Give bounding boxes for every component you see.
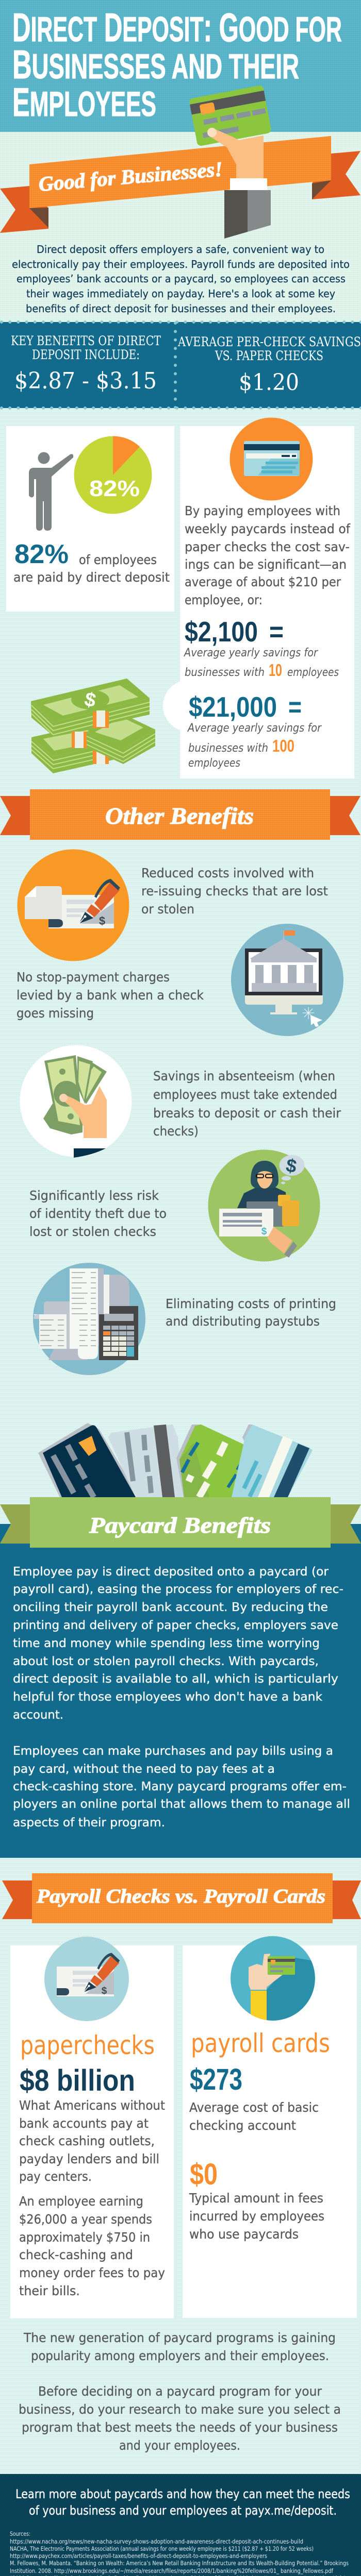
icon: document, check and pen: $ bbox=[99, 914, 105, 927]
text bbox=[166, 1296, 336, 1329]
stat: 2,100: = bbox=[269, 616, 284, 648]
text: and distributing paystubs bbox=[166, 1314, 320, 1329]
key benefits value: $2.87 - $3.15 bbox=[14, 368, 157, 394]
paycard text: employee, or: bbox=[185, 592, 262, 607]
pie chart: 82% bbox=[89, 476, 140, 501]
intro paragraph: their wages immediately on payday. Here's a look at some key bbox=[26, 287, 335, 300]
text: or stolen bbox=[141, 902, 194, 917]
panel: paycard benefits band bbox=[0, 1524, 361, 1858]
benefit: absenteeism savings bbox=[20, 1045, 341, 1158]
text: employee earning bbox=[19, 2194, 165, 2298]
key benefits label bbox=[11, 333, 161, 362]
icon: receipts and calculator bbox=[33, 1263, 145, 1375]
heading: Payroll Checks vs. Payroll Cards bbox=[36, 1886, 325, 1907]
intro paragraph: benefits of direct deposit for businesses and their employees. bbox=[26, 302, 336, 315]
paycard paragraph 1: onciling their payroll bank account. By reducing the bbox=[13, 1601, 328, 1614]
paycard paragraph 1: helpful for those employees who don't have a bank bbox=[13, 1690, 323, 1704]
text: goes missing bbox=[17, 1006, 94, 1021]
icon: hand holding cash bbox=[20, 1045, 132, 1158]
text: employee earning: check-cashing and bbox=[19, 2247, 133, 2262]
icon: fan of cards bbox=[38, 1423, 313, 1497]
heading: Paycard Benefits bbox=[89, 1514, 271, 1538]
text: employee earning: their bills. bbox=[19, 2283, 80, 2298]
text: lost or stolen checks bbox=[29, 1224, 156, 1239]
text: 8 billion: payday lenders and bill bbox=[19, 2151, 159, 2166]
text: 8 billion: check cashing outlets, bbox=[19, 2133, 155, 2148]
paycard text: weekly paycards instead of bbox=[185, 521, 351, 536]
key benefits label: KEY BENEFITS OF DIRECT bbox=[11, 333, 161, 348]
text: 0: who use paycards bbox=[189, 2227, 299, 2242]
paycard text: ings can be significant—an bbox=[185, 557, 347, 572]
intro paragraph bbox=[12, 243, 350, 315]
intro paragraph: electronically pay their employees. Payroll funds are deposited into bbox=[12, 258, 350, 270]
icon: online bank monitor bbox=[231, 924, 343, 1036]
text: Eliminating costs of printing bbox=[166, 1296, 336, 1311]
text: 0: incurred by employees bbox=[189, 2209, 324, 2224]
text: 8 billion: pay centers. bbox=[19, 2169, 92, 2184]
top stack bbox=[31, 679, 150, 736]
lower left stack bbox=[31, 721, 126, 773]
closing text: before deciding: program that best meets the needs of your business bbox=[22, 2420, 338, 2435]
paycard paragraph 2: pay card, without the need to pay fees at a bbox=[13, 1762, 275, 1776]
icon: thief with check and coins: $ bbox=[284, 1155, 298, 1177]
stat: 2,100: $2,100 bbox=[185, 616, 258, 648]
title: EMPLOYEES bbox=[12, 79, 156, 125]
text bbox=[29, 1188, 167, 1239]
panel: paycard savings bbox=[163, 417, 354, 778]
intro paragraph: Direct deposit offers employers a safe, convenient way to bbox=[37, 243, 324, 256]
text: levied by a bank when a check bbox=[17, 988, 204, 1003]
text: checks) bbox=[153, 1124, 199, 1139]
paycard text bbox=[185, 503, 351, 607]
text: breaks to deposit or cash their bbox=[153, 1106, 341, 1121]
top stack: $ bbox=[83, 688, 97, 712]
benefit: paystub costs bbox=[33, 1263, 336, 1375]
stat: 21,000: businesses with bbox=[188, 742, 268, 755]
teal card bbox=[232, 1425, 313, 1497]
icon: check and pen: $ bbox=[102, 1986, 107, 1996]
paycard paragraph 1: direct deposit is available to all, which is particularly bbox=[13, 1672, 338, 1686]
benefit: stop-payment charges bbox=[17, 924, 343, 1036]
icon: thief with check and coins bbox=[208, 1150, 320, 1261]
stat: 0: $0 bbox=[190, 2158, 218, 2191]
heading: Other Benefits bbox=[105, 803, 254, 829]
closing text: before deciding: Before deciding on a paycard program for your bbox=[38, 2384, 322, 2399]
text: employees must take extended bbox=[153, 1087, 337, 1102]
stat: 2,100: 10 bbox=[269, 660, 282, 680]
stat: 8 billion: $8 billion bbox=[20, 2064, 135, 2097]
ribbon: paycard benefits bbox=[0, 1497, 361, 1548]
closing text: new generation bbox=[23, 2330, 336, 2363]
ribbon: payroll checks vs payroll cards bbox=[2, 1873, 361, 1923]
stat: 2,100: Average yearly savings for bbox=[183, 647, 319, 659]
sources bbox=[10, 2530, 349, 2576]
text: Significantly less risk bbox=[29, 1188, 159, 1203]
stat: 2,100: employees bbox=[287, 666, 339, 679]
icon: hand holding green card bbox=[189, 85, 272, 239]
text: 8 billion: What Americans without bbox=[19, 2098, 165, 2113]
icon: stacks of cash bbox=[31, 679, 155, 773]
paycard paragraph 2 bbox=[13, 1744, 350, 1829]
footer panel bbox=[0, 2474, 361, 2576]
text: 8 billion bbox=[19, 2098, 165, 2184]
paycard paragraph 2: Employees can make purchases and pay bills using a bbox=[13, 1744, 333, 1758]
stat: 21,000 bbox=[187, 691, 322, 770]
pie chart bbox=[74, 436, 152, 514]
text: Savings in absenteeism (when bbox=[153, 1069, 335, 1083]
text: 273 bbox=[189, 2100, 319, 2133]
text bbox=[17, 970, 204, 1021]
key benefits label: DEPOSIT INCLUDE: bbox=[32, 347, 140, 362]
stat: 2,100 bbox=[183, 616, 339, 680]
text bbox=[153, 1069, 341, 1139]
text: re-issuing checks that are lost bbox=[141, 884, 328, 899]
icon: person pointing bbox=[29, 452, 73, 531]
stat: 21,000: employees bbox=[188, 757, 240, 770]
paycard paragraph 1 bbox=[13, 1565, 343, 1722]
panel: key figures band bbox=[0, 322, 361, 408]
closing text: new generation: The new generation of paycard programs is gaining bbox=[23, 2330, 336, 2345]
title bbox=[12, 5, 342, 125]
text: employee earning: money order fees to pay bbox=[19, 2265, 165, 2280]
paycard paragraph 1: about lost or stolen payroll checks. With paycards, bbox=[13, 1655, 319, 1668]
text: 8 billion: bank accounts pay at bbox=[19, 2116, 149, 2131]
closing text: new generation: popularity among employers and their employees. bbox=[31, 2348, 329, 2363]
paycard paragraph 2: ployers an online portal that allows them to manage all bbox=[13, 1798, 350, 1811]
text: employee earning: An employee earning bbox=[19, 2194, 143, 2209]
panel: payroll cards bbox=[183, 1936, 357, 2318]
header band bbox=[0, 0, 361, 132]
right stack bbox=[87, 713, 155, 764]
sources: https://www.nacha.org/news/new-nacha-survey-shows-adoption-and-awareness-direct-deposit-ach-continues-build bbox=[10, 2538, 303, 2545]
stat: 21,000: Average yearly savings for bbox=[187, 722, 322, 735]
panel: paper checks bbox=[10, 1937, 174, 2318]
benefit: identity theft bbox=[29, 1150, 320, 1261]
paycard text: paper checks the cost sav- bbox=[185, 539, 350, 554]
paycard paragraph 1: account. bbox=[13, 1708, 63, 1722]
savings value: $1.20 bbox=[239, 369, 299, 396]
intro paragraph: employees’ bank accounts or a paycard, so employees can access bbox=[17, 273, 346, 285]
ribbon: good for businesses bbox=[0, 136, 360, 233]
closing text: before deciding bbox=[19, 2384, 341, 2453]
stat: 82 percent: of employees bbox=[79, 552, 157, 567]
paycard paragraph 1: printing and delivery of paper checks, employers save bbox=[13, 1619, 338, 1632]
stat: 82 percent: 82% bbox=[14, 539, 69, 569]
benefit: reissuing checks bbox=[18, 849, 328, 961]
text: employee earning: $26,000 a year spends bbox=[19, 2212, 152, 2227]
sources: http://www.paychex.com/articles/payroll-taxes/benefits-of-direct-deposit-to-employees-and-employers bbox=[10, 2552, 267, 2560]
savings label bbox=[177, 334, 361, 363]
stat: 82 percent bbox=[13, 539, 170, 585]
text: employee earning: approximately $750 in bbox=[19, 2230, 150, 2245]
heading: paperchecks: paperchecks bbox=[20, 2030, 155, 2060]
paycard text: average of about $210 per bbox=[185, 574, 341, 589]
paycard paragraph 2: aspects of their program. bbox=[13, 1816, 165, 1829]
text: Reduced costs involved with bbox=[141, 866, 314, 880]
stat: 82 percent: are paid by direct deposit bbox=[13, 570, 170, 585]
sources: Sources: bbox=[10, 2530, 30, 2537]
icon: document, check and pen bbox=[18, 849, 129, 961]
ribbon: other benefits bbox=[0, 789, 360, 840]
call to action bbox=[15, 2487, 350, 2518]
green card bbox=[176, 1425, 254, 1497]
paycard text: By paying employees with bbox=[185, 503, 340, 518]
closing text: before deciding: and your employees. bbox=[119, 2438, 240, 2453]
text: of identity theft due to bbox=[29, 1206, 167, 1221]
ribbon heading: Good for Businesses! bbox=[38, 157, 223, 196]
icon: card in orange circle bbox=[230, 417, 313, 501]
text: 0 bbox=[189, 2191, 324, 2242]
text: 273: Average cost of basic bbox=[189, 2100, 319, 2115]
stat: 21,000: $21,000 bbox=[189, 691, 277, 723]
paycard paragraph 1: time and money while spending less time worrying bbox=[13, 1637, 320, 1650]
icon: hand holding card bbox=[231, 1936, 315, 2021]
text: 273: checking account bbox=[189, 2118, 296, 2133]
text bbox=[141, 866, 328, 917]
stat: 2,100: businesses with bbox=[185, 666, 265, 679]
stat: 273: $273 bbox=[190, 2063, 242, 2096]
savings label: VS. PAPER CHECKS bbox=[215, 348, 323, 363]
stat: 21,000: = bbox=[288, 691, 302, 723]
icon: check and pen bbox=[44, 1937, 129, 2021]
panel: 82 percent bbox=[6, 426, 174, 612]
paycard paragraph 1: payroll card), easing the process for employers of rec- bbox=[13, 1583, 343, 1596]
icon: thief with check and coins: $ bbox=[261, 1226, 267, 1237]
text: 0: Typical amount in fees bbox=[189, 2191, 323, 2206]
light card bbox=[108, 1425, 184, 1497]
heading: payroll cards: payroll cards bbox=[191, 2028, 330, 2058]
navy card bbox=[38, 1423, 139, 1497]
closing text: before deciding: business, do your research to make sure you select a bbox=[19, 2402, 341, 2417]
paycard paragraph 2: check-cashing store. Many paycard programs offer em- bbox=[13, 1780, 347, 1793]
paycard paragraph 1: Employee pay is direct deposited onto a paycard (or bbox=[13, 1565, 329, 1579]
stat: 21,000: 100 bbox=[272, 736, 294, 755]
text: No stop-payment charges bbox=[17, 970, 170, 985]
